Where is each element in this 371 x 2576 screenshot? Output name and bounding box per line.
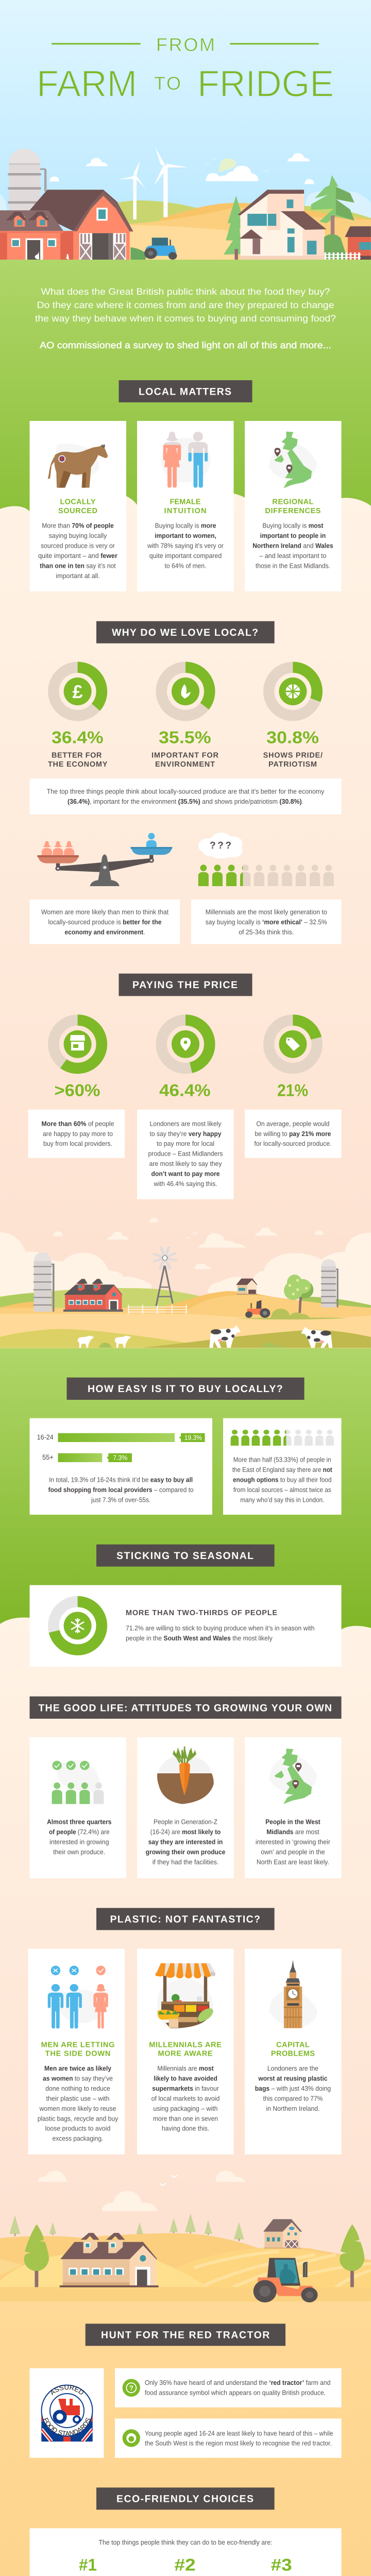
heading <box>265 498 321 515</box>
panel: londoners: with 46.4% saying this. <box>154 1180 217 1188</box>
panel: regional differences <box>245 421 341 591</box>
panel: average 21: On average, people would <box>256 1120 329 1127</box>
silos <box>33 1252 338 1312</box>
icon: assured food standards logo: FOOD STANDARDS <box>43 2417 91 2436</box>
icon: question mark <box>123 2379 140 2397</box>
text block: growing their own produce <box>146 1848 225 1856</box>
green tree <box>224 196 243 260</box>
bar: 16-24: 16-24 <box>37 1433 54 1441</box>
panel: top three summary <box>30 778 341 815</box>
heading: DIFFERENCES <box>265 507 321 515</box>
white clouds <box>49 153 314 184</box>
text block: People in Generation-Z <box>154 1818 217 1826</box>
text block: North East are least likely. <box>257 1858 329 1866</box>
text block: saying buying locally <box>49 532 107 539</box>
panel: generation z <box>137 1737 234 1878</box>
text block: More than 70% of people <box>42 521 114 530</box>
heading: SOURCED <box>58 507 97 515</box>
heading: local matters: LOCAL MATTERS <box>139 386 231 398</box>
panel: millennials more aware <box>137 1948 234 2155</box>
rank one: #1 <box>79 2555 97 2574</box>
blue tractor <box>144 238 177 260</box>
text block: this compared to 77% <box>263 2094 323 2102</box>
text block: women more likely to reuse <box>39 2105 116 2112</box>
text block: interested in ‘growing their <box>256 1838 331 1846</box>
heading: plastic: PLASTIC: NOT FANTASTIC? <box>110 1914 260 1925</box>
hills <box>119 200 197 224</box>
panel: women text <box>30 900 180 944</box>
chart: donut 36.4 economy <box>54 667 102 716</box>
panel: londoners: produce – East Midlanders <box>148 1150 223 1158</box>
bar: 55+: 7.3% <box>113 1454 127 1462</box>
text block: More than half (53.33%) of people in <box>233 1455 331 1463</box>
panel: londoners: to pay more for local <box>157 1140 214 1147</box>
panel: londoners <box>137 1110 234 1199</box>
text block: in Northern Ireland. <box>266 2105 319 2112</box>
background: cream section two with wavy top <box>0 1618 371 2303</box>
red barn <box>63 1279 123 1312</box>
right building and fence <box>324 226 371 260</box>
icon: woman and man <box>161 432 211 488</box>
icon: question mark: ? <box>129 2384 133 2392</box>
panel: millennials text <box>191 900 341 944</box>
panel: young people <box>115 2418 341 2458</box>
text block: using packaging – with <box>154 2105 217 2112</box>
text block: Northern Ireland and Wales <box>252 542 333 549</box>
stat: better for the economy <box>48 728 108 769</box>
text block <box>145 2379 330 2397</box>
text block: those in the East Midlands. <box>256 562 330 569</box>
text block: Midlands are most <box>266 1828 319 1836</box>
orange tractor with farmer <box>245 1300 270 1318</box>
panel: more than 60 <box>28 1110 125 1158</box>
panel: three quarters <box>30 1737 126 1878</box>
text block: of local markets to avoid <box>151 2094 220 2102</box>
text block: – and least important to <box>259 552 326 560</box>
panel: top three summary: The top three things people think about locally-sourced produce are that it’s better for the economy <box>47 788 325 795</box>
text block: if they had the facilities. <box>153 1858 218 1866</box>
cows <box>209 1326 332 1348</box>
panel: more than 60: buy from local providers. <box>43 1140 112 1147</box>
panel: londoners: Londoners are most likely <box>149 1120 222 1127</box>
panel: capital problems <box>245 1948 341 2155</box>
text block: People in the West <box>265 1818 321 1826</box>
heading: the good life: THE GOOD LIFE: ATTITUDES TO GROWING YOUR OWN <box>38 1703 332 1714</box>
intro text <box>35 286 336 350</box>
heading: how easy: HOW EASY IS IT TO BUY LOCALLY? <box>88 1383 283 1395</box>
heading <box>164 498 206 515</box>
icon: people with ticks <box>52 1760 104 1804</box>
fence <box>128 1305 187 1314</box>
text block <box>151 2064 220 2132</box>
panel: west midlands <box>245 1737 341 1878</box>
stat: important for environment: ENVIRONMENT <box>155 760 215 769</box>
icon: market stall <box>156 1963 215 2028</box>
people row: 53.33 percent <box>231 1430 334 1446</box>
background: green section two <box>0 1348 371 1636</box>
panel: locally sourced <box>30 421 126 591</box>
panel: average 21 <box>245 1110 341 1158</box>
pine trees <box>9 2213 244 2240</box>
panel: millennials text: say buying locally is ‘more ethical’ – 32.5% <box>206 918 327 926</box>
heading: hunt for the red tractor <box>86 2324 285 2346</box>
heading <box>149 2041 222 2058</box>
text block <box>38 2064 119 2142</box>
heading: plastic <box>96 1908 275 1930</box>
text block: Only 36% have heard of and understand the ‘red tractor’ farm and <box>145 2379 330 2386</box>
heading: why do we love local <box>96 621 275 643</box>
text block <box>255 2064 331 2112</box>
panel: average 21: for locally-sourced produce. <box>254 1140 331 1147</box>
text block: their plastic use – with <box>46 2094 109 2102</box>
text block: likely to have avoided <box>154 2074 217 2082</box>
text block: interested in growing <box>49 1838 109 1846</box>
icon: assured food standards logo: ASSURED <box>50 2385 83 2396</box>
heading <box>271 2041 315 2058</box>
intro text: Do they care where it comes from and are they prepared to change <box>37 300 334 310</box>
text block: enough options to buy all their food <box>233 1476 331 1484</box>
icon: uk map with pins <box>269 432 317 488</box>
panel: women text: economy and environment. <box>65 928 145 936</box>
icon: carrot <box>157 1746 214 1804</box>
background: orange section <box>0 2301 371 2576</box>
chart: donut over 60 <box>54 1020 102 1068</box>
chart: donut 71.2 <box>54 1602 102 1650</box>
chart: donut 46.4 <box>161 1020 210 1068</box>
stat: important for environment <box>151 728 219 769</box>
chart: donut 21 <box>269 1020 317 1068</box>
panel: londoners: are most likely to say they <box>149 1160 222 1167</box>
heading: sticking to seasonal <box>96 1545 275 1567</box>
text block: In total, 19.3% of 16-24s think it’d be easy to buy all <box>49 1476 193 1484</box>
farm scene two <box>0 1218 371 1348</box>
background: cream section with wavy top <box>0 494 371 1350</box>
text block: own’ and people in the <box>261 1848 325 1856</box>
panel: seasonal <box>30 1585 341 1667</box>
people row: 32.5 percent <box>198 865 334 886</box>
text block: Londoners are the <box>267 2064 318 2072</box>
rank two: #2 <box>174 2555 196 2574</box>
heading: paying the price: PAYING THE PRICE <box>132 979 238 991</box>
heading: MORE THAN TWO-THIRDS OF PEOPLE <box>126 1609 277 1617</box>
trees <box>24 2224 364 2287</box>
text block <box>147 521 224 569</box>
intro text: AO commissioned a survey to shed light on all of this and more... <box>40 340 331 350</box>
text block: from local sources – almost twice as <box>233 1486 331 1494</box>
text block <box>145 2430 333 2447</box>
stat: shows pride: SHOWS PRIDE/ <box>263 752 323 760</box>
text block: plastic bags, recycle and buy <box>38 2114 119 2122</box>
text block: Men are twice as likely <box>44 2064 112 2072</box>
heading: the good life <box>30 1697 341 1719</box>
text block: food shopping from local providers – compared to <box>48 1486 194 1494</box>
chart: donut 36.4 economy: £ <box>73 681 83 702</box>
icon: millennials thought bubble and people <box>198 833 334 886</box>
heading: how easy <box>67 1378 304 1400</box>
stat: 46.4 percent: 46.4% <box>159 1080 211 1099</box>
bar: 16-24: 19.3% <box>184 1434 202 1442</box>
text block: as women to say they’ve <box>43 2074 113 2082</box>
pale sun <box>219 159 237 172</box>
title: FRIDGE <box>197 63 334 105</box>
background: green intro band <box>0 260 371 522</box>
heading <box>58 498 97 515</box>
text block: quite important – and fewer <box>38 552 117 560</box>
text block: supermarkets in favour <box>152 2084 219 2092</box>
text block: with 78% saying it’s very or <box>147 542 224 549</box>
text block: Almost three quarters <box>47 1818 111 1826</box>
panel: eco friendly top things <box>30 2528 341 2576</box>
text block: important at all. <box>56 572 100 580</box>
windmill <box>153 1246 177 1306</box>
panel: more than 60: are happy to pay more to <box>43 1130 113 1138</box>
panel: women text: locally-sourced produce is better for the <box>48 918 162 926</box>
heading: local matters <box>119 380 252 402</box>
small house <box>236 1279 258 1295</box>
panel: londoners: to say they’re very happy <box>149 1130 222 1138</box>
stat: better for the economy: 36.4% <box>52 728 104 747</box>
house <box>238 190 327 260</box>
bush <box>130 247 147 260</box>
text block <box>126 1624 314 1642</box>
silo <box>8 148 45 213</box>
title: FARM <box>37 63 137 105</box>
text block: loose products to avoid <box>45 2125 110 2132</box>
heading: INTUITION <box>164 507 206 515</box>
text block: their own produce. <box>53 1848 105 1856</box>
text block: just 7.3% of over-55s. <box>91 1496 150 1504</box>
icon: assured food standards logo <box>41 2384 93 2442</box>
tree <box>271 1275 313 1318</box>
text block: the South West is the region most likely to recognise the red tractor. <box>145 2439 332 2447</box>
heading: MILLENNIALS ARE <box>149 2041 222 2049</box>
text block: more than one in seven <box>153 2114 218 2122</box>
heading: THE SIDE DOWN <box>45 2050 110 2058</box>
barn <box>0 190 133 260</box>
heading: LOCALLY <box>60 498 96 506</box>
heading: eco-friendly choices: ECO-FRIENDLY CHOICES <box>116 2494 254 2505</box>
icon: smiling face <box>123 2429 140 2447</box>
text block: important to people in <box>260 532 326 539</box>
text: The top things people think they can do to be eco-friendly are: <box>99 2538 272 2546</box>
intro text: What does the Great British public think about the food they buy? <box>41 286 330 297</box>
panel: age bar chart <box>30 1418 212 1515</box>
heading: FEMALE <box>170 498 201 506</box>
chart: donut 30.8 pride <box>269 667 317 716</box>
text block: Buying locally is most <box>262 521 324 530</box>
stat: shows pride <box>263 728 323 769</box>
text block: people in the South West and Wales the most likely <box>126 1634 273 1642</box>
icon: uk map with pins <box>269 1749 317 1804</box>
title: FROM <box>156 34 215 55</box>
panel: female intuition <box>137 421 234 591</box>
panel: only 36 percent <box>115 2368 341 2408</box>
stat: important for environment: 35.5% <box>159 728 211 747</box>
heading: MEN ARE LETTING <box>41 2041 114 2049</box>
bar: 55+: 55+ <box>42 1453 54 1461</box>
text block: excess packaging. <box>53 2134 103 2142</box>
panel: average 21: be willing to pay 21% more <box>255 1130 331 1138</box>
panel: red tractor logo <box>30 2368 104 2458</box>
heading: why do we love local: WHY DO WE LOVE LOCAL? <box>112 627 258 638</box>
text block: many who’d say this in London. <box>240 1496 324 1504</box>
title <box>37 34 334 105</box>
text block: done nothing to reduce <box>45 2084 110 2092</box>
heading: CAPITAL <box>276 2041 310 2049</box>
heading: sticking to seasonal: STICKING TO SEASONAL <box>116 1550 254 1562</box>
panel: men are letting the side down <box>28 1948 125 2155</box>
sheep <box>78 1336 131 1348</box>
text block: worst at reusing plastic <box>258 2074 327 2082</box>
chart: donut 35.5 environment <box>161 667 210 716</box>
stat: shows pride: 30.8% <box>266 728 319 747</box>
stat: shows pride: PATRIOTISM <box>268 760 317 769</box>
text block: of people (72.4%) are <box>49 1828 110 1836</box>
clouds <box>0 1218 371 1314</box>
bar: 55+ <box>42 1453 132 1462</box>
heading <box>41 2041 114 2058</box>
text block <box>38 521 117 580</box>
hero farm scene <box>0 147 371 260</box>
farm scene three <box>0 2171 371 2302</box>
heading: PROBLEMS <box>271 2050 315 2058</box>
heading: REGIONAL <box>272 498 314 506</box>
text block: Young people aged 16-24 are least likely to have heard of this – while <box>145 2430 333 2437</box>
text block: to 64% of men. <box>165 562 206 569</box>
icon: men and woman <box>48 1965 108 2028</box>
text block <box>252 521 333 569</box>
text block: the East of England say there are not <box>232 1466 332 1473</box>
text block: bags – with just 43% doing <box>255 2084 331 2092</box>
panel: londoners: don’t want to pay more <box>151 1170 220 1178</box>
text block: Buying locally is more <box>155 521 216 530</box>
text block: 71.2% are willing to stick to buying produce when it’s in season with <box>126 1624 314 1632</box>
stat: 21 percent: 21% <box>277 1080 308 1099</box>
hills <box>0 1288 199 1314</box>
rank three: #3 <box>271 2555 292 2574</box>
intro text: the way they behave when it comes to buying and consuming food? <box>35 313 336 324</box>
stat: important for environment: IMPORTANT FOR <box>151 752 219 760</box>
text block <box>47 1818 111 1856</box>
panel: more than 60: More than 60% of people <box>41 1120 114 1127</box>
text block: (16-24) are most likely to <box>150 1828 221 1836</box>
barn <box>60 2233 159 2287</box>
orange tractor <box>254 2258 318 2302</box>
text block: sourced produce is very or <box>41 542 115 549</box>
panel: millennials text: of 25-34s think this. <box>239 928 294 936</box>
text block: say they are interested in <box>148 1838 223 1846</box>
icon: big ben <box>269 1960 317 2028</box>
stat: over 60 percent: >60% <box>55 1080 100 1099</box>
panel: women text: Women are more likely than men to think that <box>41 908 168 916</box>
text block: than one in ten say it’s not <box>40 562 116 569</box>
icon: balance scale with women and man <box>38 833 172 886</box>
far house <box>263 2219 302 2248</box>
text block: quite important compared <box>149 552 222 560</box>
panel: east of england <box>223 1418 341 1515</box>
text block: having done this. <box>162 2125 209 2132</box>
heading: MORE AWARE <box>158 2050 213 2058</box>
stat: better for the economy: BETTER FOR <box>52 752 102 760</box>
bar: 16-24 <box>37 1433 205 1442</box>
background: sky <box>0 0 371 260</box>
text block <box>48 1476 194 1504</box>
text: question marks: ? ? ? <box>210 840 231 851</box>
panel: top three summary: (36.4%), important for the environment (35.5%) and shows pride/patriotism (30.8%). <box>68 798 303 805</box>
text block: food assurance symbol which appears on quality British produce. <box>145 2389 326 2397</box>
title: TO <box>154 73 181 94</box>
pine tree <box>311 175 355 260</box>
text block <box>232 1455 332 1504</box>
panel: millennials text: Millennials are the most likely generation to <box>206 908 327 916</box>
heading: paying the price <box>119 974 252 996</box>
clouds <box>38 2171 245 2211</box>
text block <box>256 1818 331 1866</box>
hills <box>0 2233 371 2287</box>
heading: hunt for the red tractor: HUNT FOR THE RED TRACTOR <box>101 2330 269 2341</box>
wind turbines <box>119 147 188 219</box>
icon: cow <box>48 444 108 488</box>
heading: eco-friendly choices <box>96 2487 275 2510</box>
stat: better for the economy: THE ECONOMY <box>48 760 108 769</box>
text block: Millennials are most <box>157 2064 214 2072</box>
text block: important to women, <box>155 532 216 539</box>
text block <box>146 1818 225 1866</box>
